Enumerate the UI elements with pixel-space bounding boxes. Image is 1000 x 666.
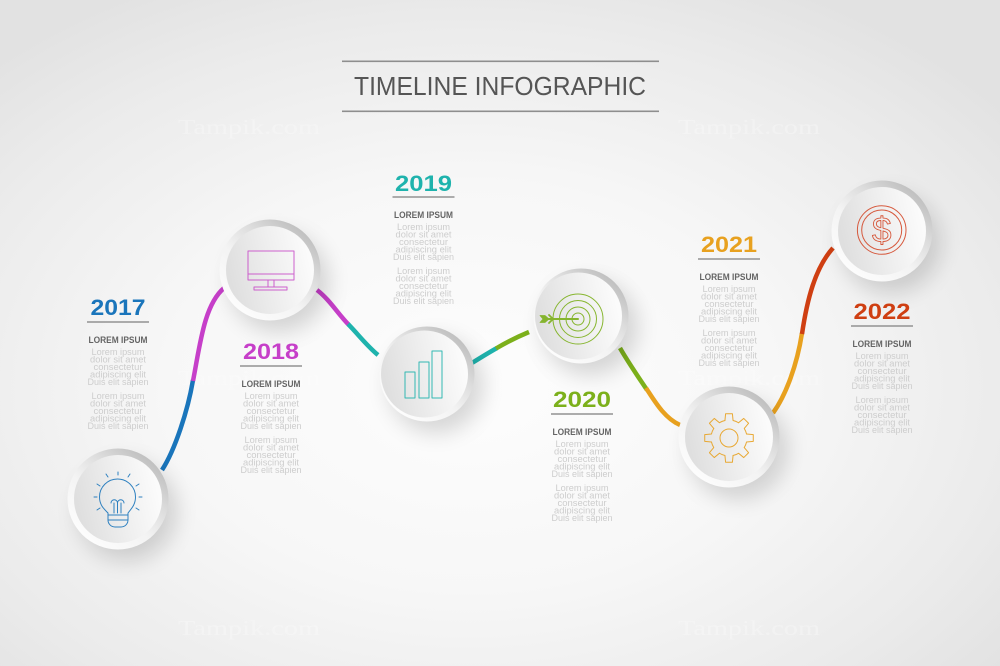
text block: 2018: 2018 [243,339,299,364]
text block: 2022: 2022 [853,299,911,324]
text block: 2022: Lorem ipsum [856,351,908,361]
node: 2022 dollar coin [832,180,941,293]
text block: 2017: consectetur [94,362,142,372]
node: 2017 lightbulb [68,448,177,561]
text block: 2017: dolor sit amet [90,354,147,364]
text block: 2019 [392,171,454,306]
icon: monitor [248,251,294,290]
text block: 2022: dolor sit amet [854,358,911,368]
text block: 2019: Duis elit sapien [393,252,454,262]
text block: 2021: consectetur [704,343,754,353]
text block: 2022 [851,299,913,435]
text block: 2018: Lorem ipsum [244,391,298,401]
text block: 2017: Lorem ipsum [92,391,144,401]
icon: lightbulb [94,472,142,527]
text block: 2022: dolor sit amet [854,402,911,412]
text block: 2019: adipiscing elit [396,244,452,254]
text block: 2017: Duis elit sapien [88,421,148,431]
text block: 2017: consectetur [94,406,142,416]
text block: 2018: consectetur [246,406,296,416]
text block: 2020: Duis elit sapien [552,513,612,523]
text block: 2020: LOREM IPSUM [552,427,612,437]
text block: 2020: Lorem ipsum [556,439,608,449]
watermarks: Tampik.com [178,366,320,390]
text block: 2022: consectetur [858,410,906,420]
text block: 2018 [240,339,302,475]
text block: 2021: adipiscing elit [701,350,758,360]
text block: 2022: Lorem ipsum [856,395,908,405]
text block: 2022: Duis elit sapien [852,381,912,391]
text block: 2019: Lorem ipsum [397,222,450,232]
icon: dollar coin: $ [872,211,891,250]
text block: 2019: 2019 [395,171,452,196]
text block: 2019: consectetur [399,281,448,291]
watermarks: Tampik.com [178,616,320,640]
timeline curve [162,248,833,470]
text block: 2017: adipiscing elit [90,414,147,424]
text block: 2021: dolor sit amet [701,292,758,302]
text block: 2017 [87,295,149,431]
text block: 2020: 2020 [553,387,611,412]
node: 2020 target [534,268,638,375]
text block: 2021: Duis elit sapien [698,358,760,368]
text block: 2021: Duis elit sapien [698,314,760,324]
watermarks [178,115,820,640]
text block: 2017: LOREM IPSUM [88,335,148,345]
text block: 2022: adipiscing elit [854,374,911,384]
text block: 2019: Lorem ipsum [397,266,450,276]
text block: 2018: Duis elit sapien [240,421,302,431]
text block: 2017: dolor sit amet [90,398,147,408]
text block: 2020: adipiscing elit [554,462,611,472]
node: 2021 gear [678,386,788,499]
text block: 2021: Lorem ipsum [702,284,756,294]
text block: 2018: Duis elit sapien [240,465,302,475]
text block: 2018: adipiscing elit [243,414,300,424]
icon: bar chart [405,351,442,398]
text block: 2020: Duis elit sapien [552,469,612,479]
watermarks: Tampik.com [178,115,320,139]
node: 2018 monitor [220,220,329,332]
text block: 2019: consectetur [399,237,448,247]
text block: 2018: LOREM IPSUM [242,379,300,389]
text block: 2018: Lorem ipsum [244,435,298,445]
text block: 2019: dolor sit amet [396,230,452,240]
text block: 2020: consectetur [558,498,606,508]
text block: 2021: consectetur [704,299,754,309]
text block: 2018: consectetur [246,450,296,460]
text block: 2022: Duis elit sapien [852,425,912,435]
text block: 2020: dolor sit amet [554,490,611,500]
text block: 2020: adipiscing elit [554,506,611,516]
icon: gear [705,414,753,462]
text block: 2018: dolor sit amet [243,442,300,452]
text block: 2021: 2021 [701,232,757,257]
text block: 2020: dolor sit amet [554,446,611,456]
text block: 2021: adipiscing elit [701,306,758,316]
text block: 2017: Duis elit sapien [88,377,148,387]
title: TIMELINE INFOGRAPHIC [354,71,646,101]
text block: 2018: adipiscing elit [243,458,300,468]
text block: 2019: adipiscing elit [396,288,452,298]
text block: 2018: dolor sit amet [243,398,300,408]
text block: 2020 [551,387,613,523]
text block: 2021: Lorem ipsum [702,328,756,338]
text block: 2017: Lorem ipsum [92,347,144,357]
text block: 2020: consectetur [558,454,606,464]
node: 2019 bar chart [380,326,484,433]
watermarks: Tampik.com [678,616,820,640]
text block: 2021: dolor sit amet [701,336,758,346]
watermarks: Tampik.com [678,366,820,390]
text block: 2019: LOREM IPSUM [394,210,453,220]
text block: 2022: LOREM IPSUM [852,339,912,349]
text block: 2021: LOREM IPSUM [700,272,758,282]
text block: 2019: dolor sit amet [396,274,452,284]
text block: 2020: Lorem ipsum [556,483,608,493]
text block: 2022: consectetur [858,366,906,376]
icon: target [540,294,603,344]
text block: 2017: 2017 [90,295,146,320]
text block: 2021 [698,232,760,368]
text block: 2022: adipiscing elit [854,418,911,428]
text block: 2019: Duis elit sapien [393,296,454,306]
text block: 2017: adipiscing elit [90,370,147,380]
watermarks: Tampik.com [678,115,820,139]
